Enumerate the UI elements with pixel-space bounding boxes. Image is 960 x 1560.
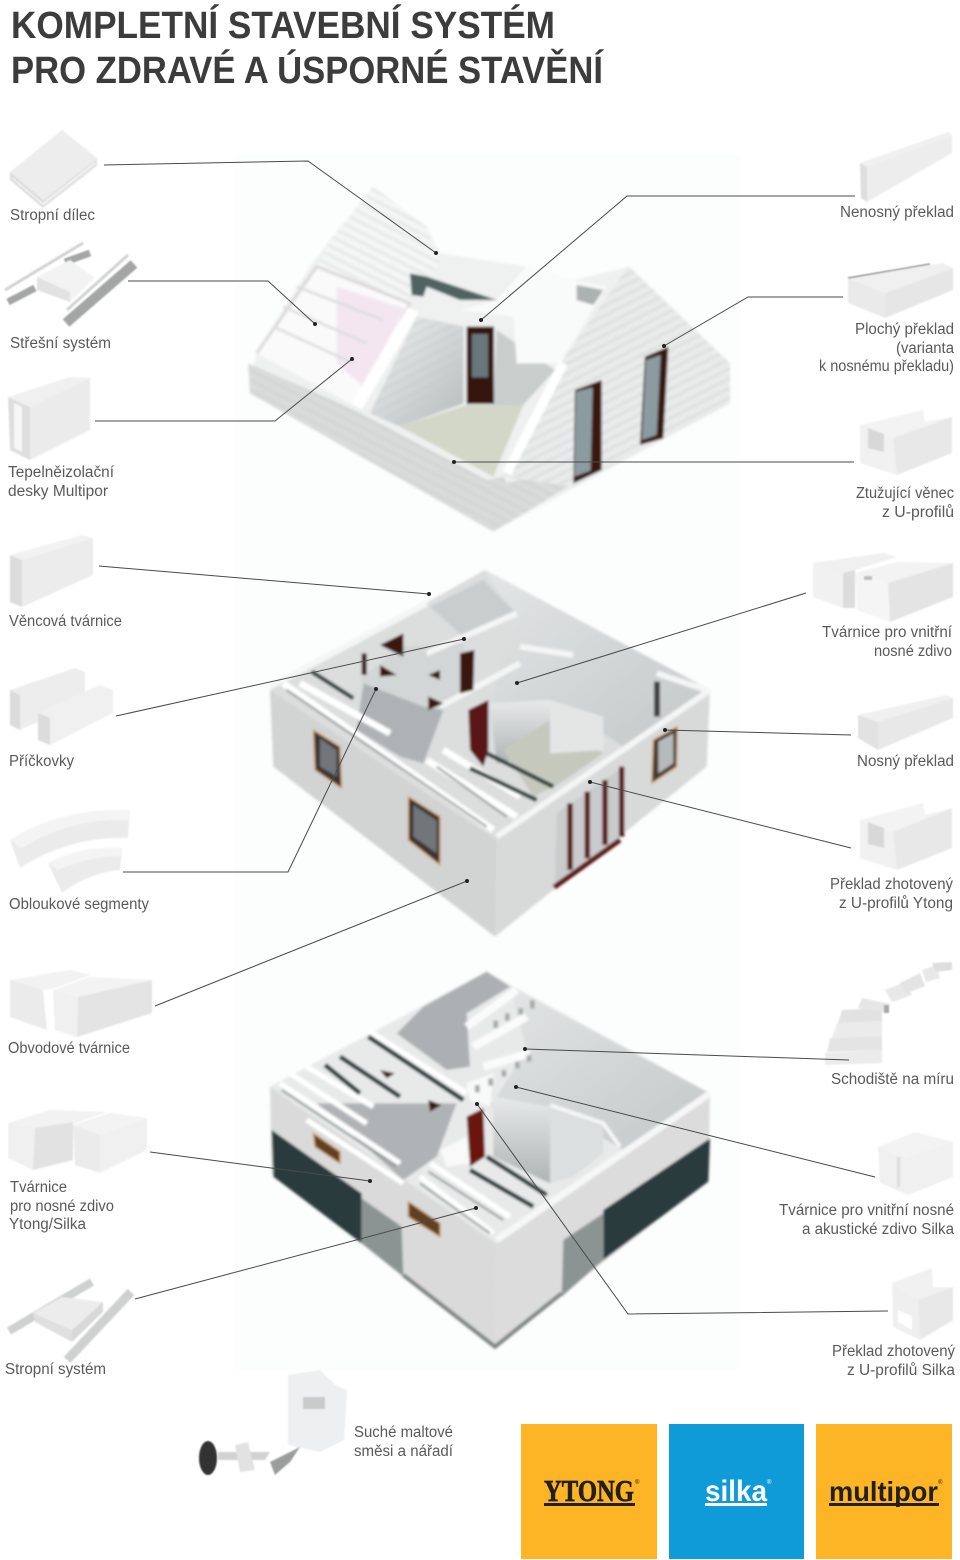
labels: right column: Tvárnice pro vnitřní bbox=[822, 624, 953, 641]
icon: flat lintel bbox=[848, 263, 953, 318]
icon: roof system bbox=[5, 243, 134, 323]
icon: outer wall blocks bbox=[10, 970, 152, 1037]
leader line end dots bbox=[313, 251, 667, 1210]
icon: staircase bbox=[825, 962, 952, 1065]
icon: arc segments bbox=[10, 810, 130, 893]
labels: right column: Plochý překlad bbox=[855, 321, 954, 338]
illustration: upper floor of the house bbox=[270, 570, 710, 937]
labels: left column: desky Multipor bbox=[8, 483, 108, 500]
illustration: roof level of the house bbox=[248, 187, 730, 532]
icon: insulation board bbox=[8, 377, 90, 460]
labels: left column: Tvárnice bbox=[10, 1179, 67, 1196]
illustration: ground floor of the house bbox=[270, 972, 710, 1347]
label: dry mortar and tools: Suché maltové bbox=[354, 1424, 453, 1441]
labels: left column: Stropní dílec bbox=[10, 207, 95, 224]
labels: right column: nosné zdivo bbox=[874, 643, 952, 660]
icon: non-load-bearing lintel bbox=[860, 132, 952, 202]
labels: right column: Ztužující věnec bbox=[856, 485, 954, 502]
logo: Multipor: multipor bbox=[829, 1476, 938, 1507]
labels: left column: Stropní systém bbox=[5, 1361, 106, 1378]
logo: Multipor bbox=[816, 1424, 952, 1559]
icon: ring beam block bbox=[10, 535, 93, 607]
labels: right column: z U-profilů Ytong bbox=[839, 895, 953, 912]
logo: Silka: ® bbox=[767, 1479, 772, 1486]
leader lines bbox=[95, 161, 888, 1314]
logo: Ytong bbox=[521, 1424, 657, 1559]
labels: left column bbox=[5, 207, 149, 1378]
labels: left column: Příčkovky bbox=[9, 753, 74, 770]
labels: right column: z U-profilů Silka bbox=[847, 1362, 955, 1379]
icon: ceiling panel bbox=[10, 130, 97, 208]
labels: left column: Ytong/Silka bbox=[9, 1216, 86, 1233]
labels: right column: (varianta bbox=[896, 340, 954, 357]
title: PRO ZDRAVÉ A ÚSPORNÉ STAVĚNÍ bbox=[11, 48, 604, 92]
labels: left column: Tepelněizolační bbox=[8, 464, 115, 481]
icon: dry mortar bag and tools bbox=[199, 1370, 347, 1475]
labels: left column: pro nosné zdivo bbox=[10, 1198, 114, 1215]
logo: Ytong: ® bbox=[635, 1479, 640, 1486]
labels: right column: k nosnému překladu) bbox=[819, 358, 954, 375]
icon: Silka inner block bbox=[878, 1132, 953, 1195]
icon: partition blocks bbox=[10, 668, 113, 745]
title: KOMPLETNÍ STAVEBNÍ SYSTÉM bbox=[11, 3, 555, 47]
labels: left column: Obvodové tvárnice bbox=[8, 1040, 130, 1057]
labels: right column: Nosný překlad bbox=[857, 753, 954, 770]
title bbox=[11, 3, 604, 92]
labels: left column: Obloukové segmenty bbox=[9, 896, 149, 913]
icon: floor system bbox=[9, 1282, 131, 1360]
labels: left column: Věncová tvárnice bbox=[9, 613, 122, 630]
labels: right column: Překlad zhotovený bbox=[830, 876, 953, 893]
labels: right column: a akustické zdivo Silka bbox=[802, 1221, 954, 1238]
icon: U-profile ring bbox=[860, 410, 952, 475]
label: dry mortar and tools bbox=[354, 1424, 454, 1460]
labels: right column: Schodiště na míru bbox=[831, 1071, 954, 1088]
labels: right column: z U-profilů bbox=[882, 504, 954, 521]
icon: load-bearing wall blocks bbox=[8, 1110, 147, 1173]
labels: right column: Nenosný překlad bbox=[840, 204, 954, 221]
labels: right column bbox=[779, 204, 955, 1379]
label: dry mortar and tools: směsi a nářadí bbox=[354, 1443, 454, 1460]
logo: Silka bbox=[669, 1424, 804, 1559]
logo: Multipor: ® bbox=[938, 1479, 943, 1486]
labels: left column: Střešní systém bbox=[10, 335, 111, 352]
icon: load-bearing lintel bbox=[858, 695, 953, 750]
logo: Ytong: YTONG bbox=[544, 1473, 634, 1508]
logo: Silka: silka bbox=[705, 1475, 767, 1508]
icon: inner wall blocks bbox=[813, 553, 953, 622]
labels: right column: Tvárnice pro vnitřní nosné bbox=[779, 1202, 954, 1219]
icon: U-profile Ytong bbox=[860, 803, 952, 870]
labels: right column: Překlad zhotovený bbox=[832, 1343, 955, 1360]
icon: U-profile Silka bbox=[892, 1268, 953, 1340]
